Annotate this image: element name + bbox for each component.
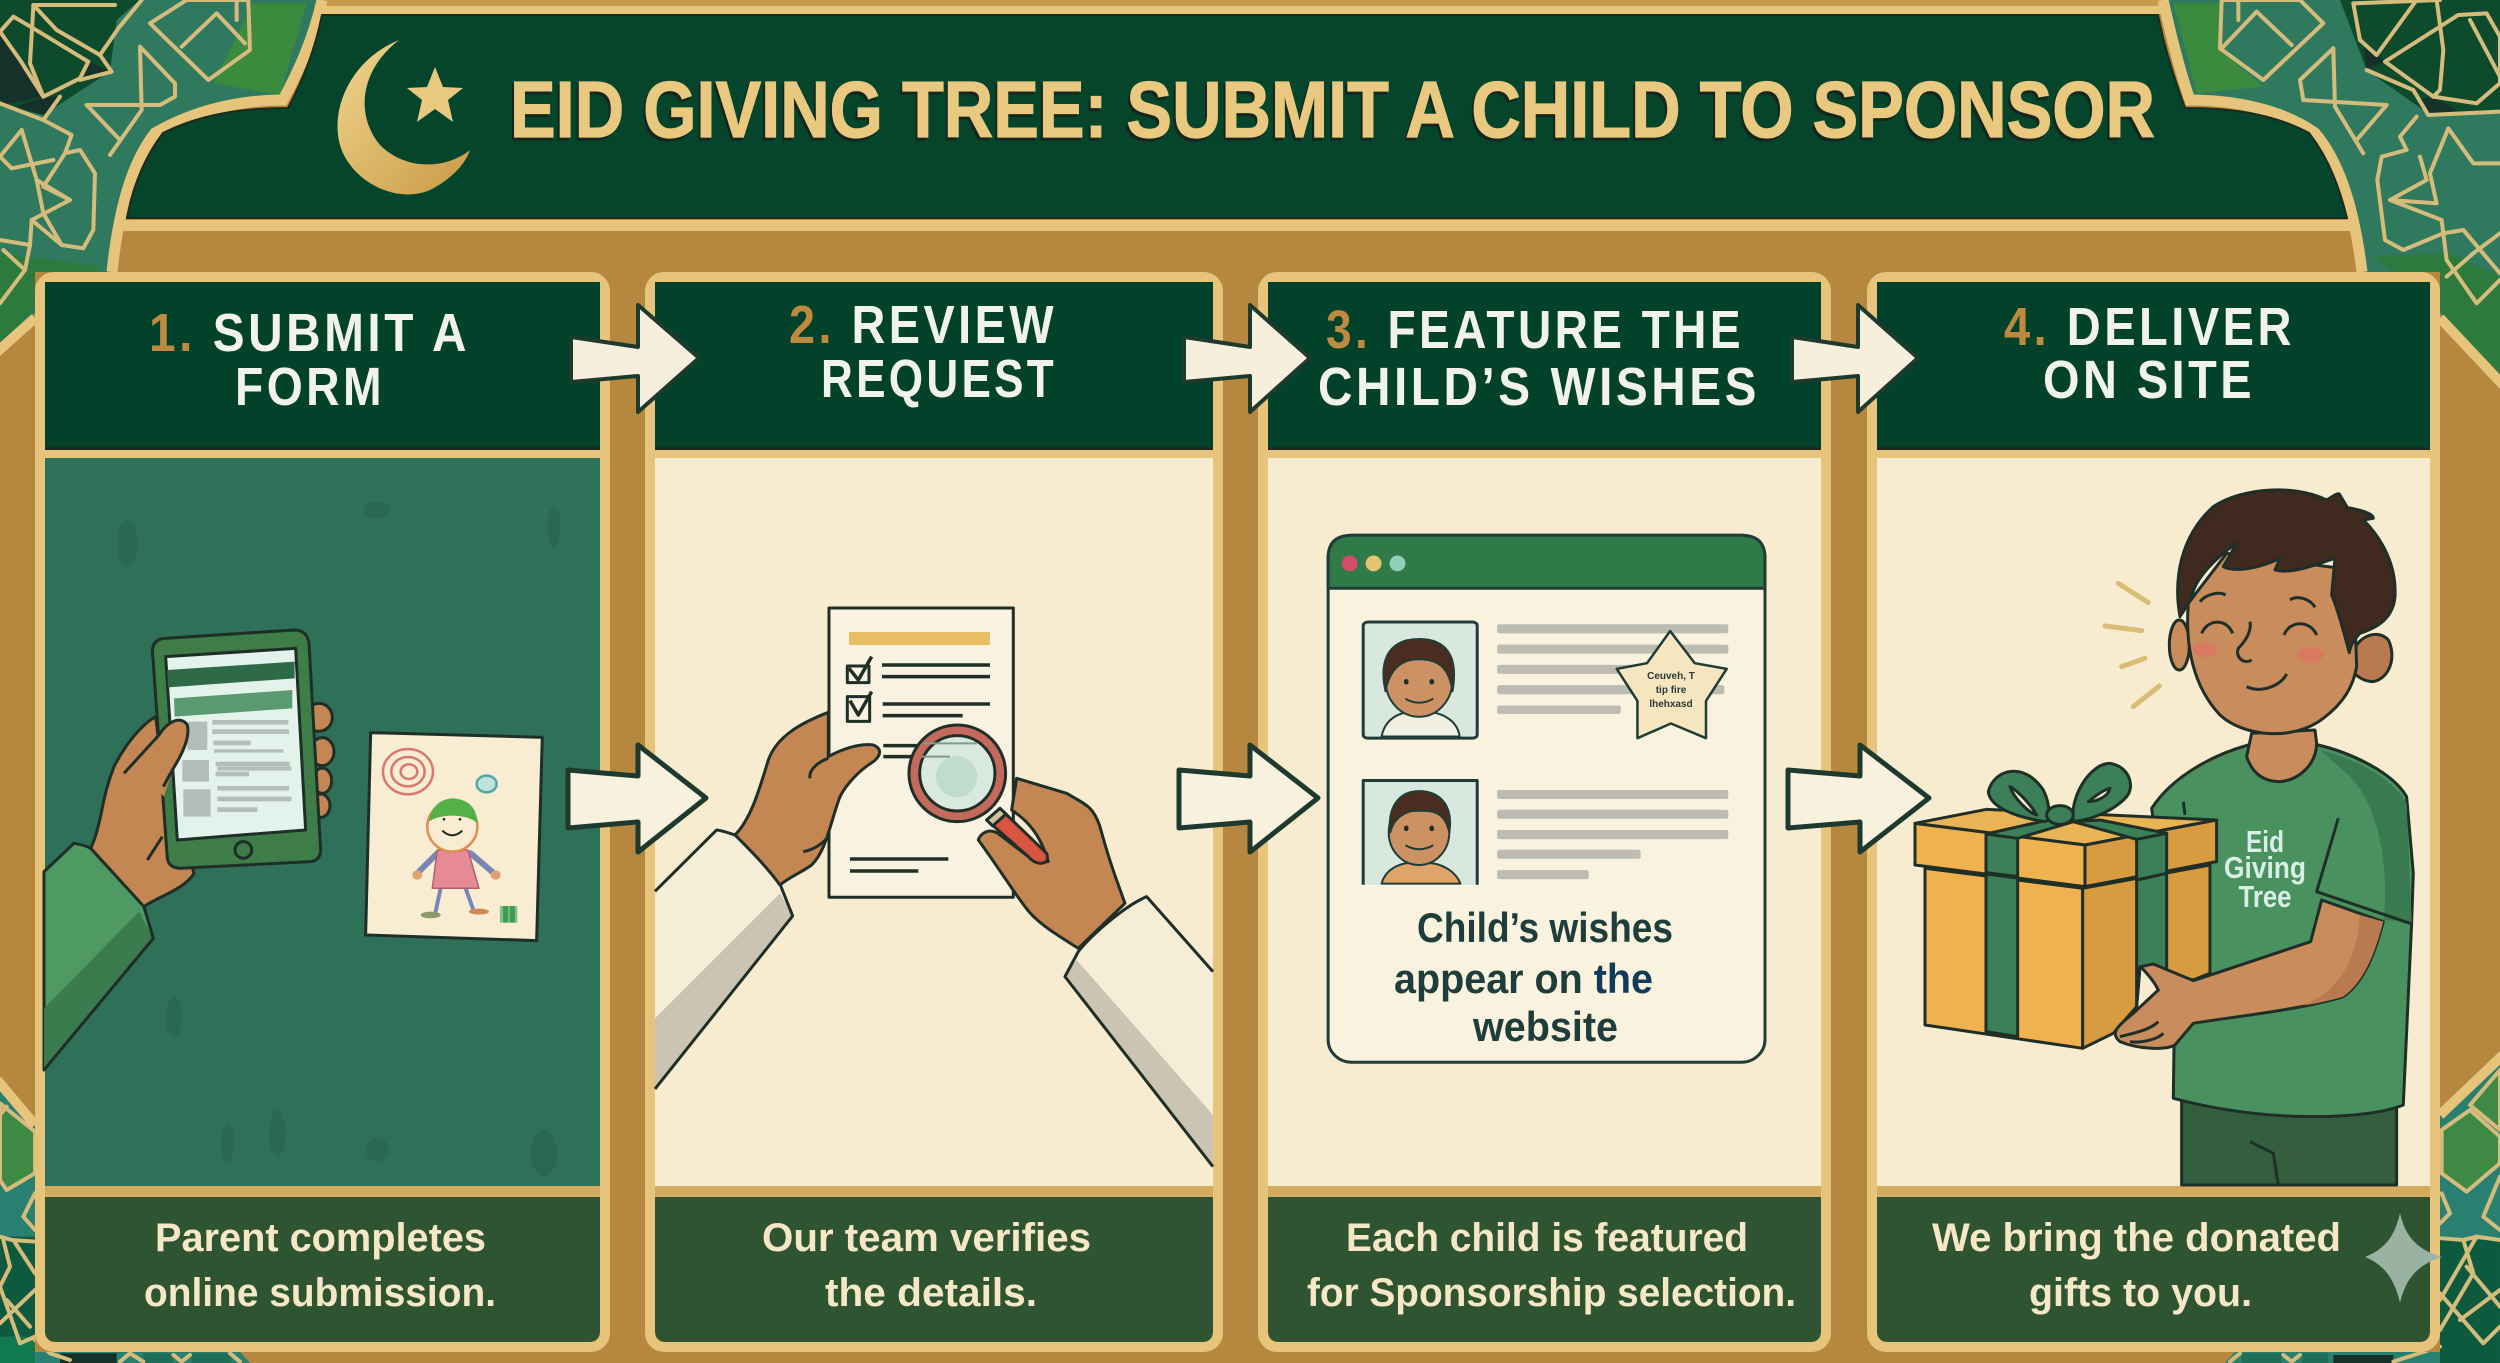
caption [1307,1216,1796,1315]
heading: 3. FEATURE THE [1326,300,1744,360]
corner ornament: top right [2168,0,2500,374]
panel 3: feature the child's wishes: CHILD’S WISHES [1318,357,1760,417]
panel 4: deliver on site [1872,277,2442,1347]
shirt text [2224,824,2306,914]
arrow: header step 1 to 2 [571,305,699,412]
arrow: header step 2 to 3 [1184,305,1310,412]
title banner [112,0,2362,272]
corner ornament: bottom right [2200,1060,2500,1363]
icon: sparkle [2365,1213,2442,1303]
star badge text: tip fire [1656,685,1687,696]
panel 4: deliver on site: ON SITE [2043,350,2255,410]
arrow: body step 3 to 4 [1788,745,1929,852]
window caption [1394,904,1673,1050]
star badge text: lhehxasd [1649,699,1693,710]
caption [762,1216,1091,1315]
illustration: hands reviewing document with magnifier [655,608,1213,1167]
panel 2: review request: REQUEST [821,349,1057,409]
heading: 2. REVIEW [789,295,1057,355]
icon: crescent moon [337,40,470,194]
window caption: website [1472,1003,1618,1050]
window caption: appear on the [1394,955,1653,1002]
arrow: body step 2 to 3 [1179,745,1318,852]
caption: the details. [825,1271,1037,1315]
shirt text: Tree [2238,879,2292,914]
illustration: website window with child profiles [1328,535,1765,1062]
corner ornament: top left [0,0,316,342]
panel 1: submit a form [40,277,605,1347]
caption: Parent completes [155,1216,486,1260]
illustration: boy holding gift [1915,490,2413,1185]
caption: We bring the donated [1932,1216,2341,1260]
star badge text [1647,671,1695,710]
shirt text: Giving [2224,850,2306,885]
window caption: Child’s wishes [1417,904,1673,951]
panel 2: review request [650,277,1218,1347]
heading: 1. SUBMIT A [149,303,470,363]
caption [1932,1216,2341,1315]
illustration: hand with phone and child's drawing [44,502,561,1177]
gold margin bands [0,318,2500,1125]
caption: for Sponsorship selection. [1307,1271,1796,1315]
star badge text: Ceuveh, T [1647,671,1695,682]
arrow: header step 3 to 4 [1792,305,1918,412]
shirt text: Eid [2246,824,2284,859]
caption: Each child is featured [1346,1216,1748,1260]
heading: 4. DELIVER [2004,297,2295,357]
caption [144,1216,496,1315]
caption: online submission. [144,1271,496,1315]
corner ornament: bottom left [0,1092,250,1363]
panel 3: feature the child's wishes [1263,277,1826,1347]
caption: gifts to you. [2029,1271,2252,1315]
icon: star [407,67,463,122]
title text: EID GIVING TREE: SUBMIT A CHILD TO SPONSOR [510,65,2155,154]
caption: Our team verifies [762,1216,1091,1260]
panel 1: submit a form: FORM [235,357,385,417]
arrow: body step 1 to 2 [568,745,706,852]
